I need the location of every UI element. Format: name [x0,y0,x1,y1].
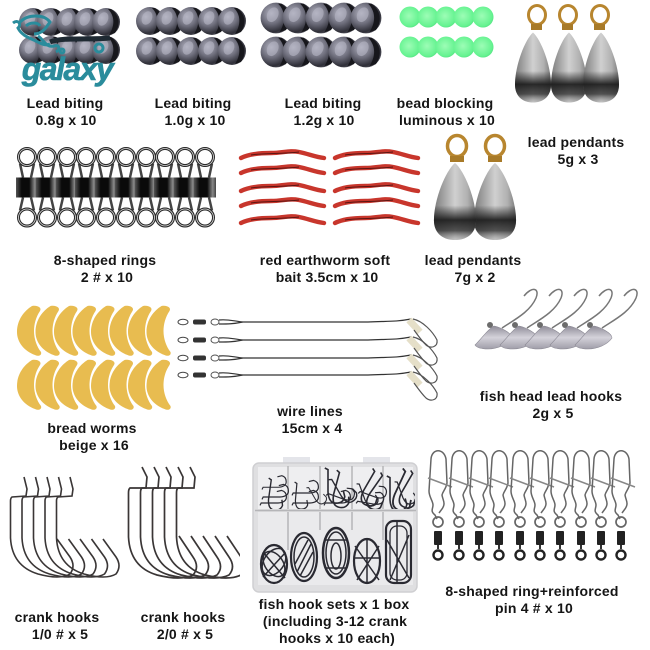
label: lead biting 0.8g: 0.8g x 10 [36,112,96,128]
label: lead biting 1.2g: Lead biting [285,95,361,111]
label: fish head lead hooks: fish head lead hooks [480,388,622,404]
label: lead pendants 7g [425,252,521,285]
label: wire lines: 15cm x 4 [282,420,342,436]
label: red earthworm [260,252,390,285]
label: wire lines: wire lines [276,403,343,419]
bread worms beige [17,306,171,410]
label: crank hooks 1/0: crank hooks [15,609,99,625]
label: 8-shaped rings [54,252,156,285]
lead pendants 7g [434,136,516,240]
label: fish hook sets: (including 3-12 crank [263,613,407,629]
label: lead biting 0.8g: Lead biting [27,95,103,111]
fish hook box [253,457,428,592]
label: wire lines [276,403,343,436]
fish head lead hooks [475,289,637,349]
label: fish head lead hooks: 2g x 5 [533,405,573,421]
crank hooks 2/0 [128,467,244,578]
label: bread worms [47,420,137,453]
label: lead biting 1.0g: Lead biting [155,95,231,111]
label: bead blocking [397,95,495,128]
label: lead biting 1.0g: 1.0g x 10 [165,112,225,128]
label: lead pendants 5g: lead pendants [528,134,624,150]
label: 8-shaped ring + reinforced pin: pin 4 # x 10 [495,600,573,616]
label: lead biting 1.2g: 1.2g x 10 [294,112,354,128]
logo wordmark: galaxy [21,51,116,87]
label: 8-shaped ring + reinforced pin: 8-shaped ring+reinforced [445,583,619,599]
label: fish hook sets: fish hook sets x 1 box [259,596,409,612]
label: crank hooks 2/0 [141,609,225,642]
upper row of hooks [260,467,415,509]
lead pendants 5g [515,6,619,102]
lower row of hooks [257,521,411,583]
label: fish hook sets: hooks x 10 each) [279,630,395,646]
label: lead pendants 5g [528,134,624,167]
lead biting 1.2g beads [261,3,381,67]
luminous blocking beads [400,6,494,58]
red earthworms [241,151,418,223]
label: lead pendants 7g: lead pendants [425,252,521,268]
label: bread worms: bread worms [47,420,137,436]
label: fish head lead hooks [480,388,622,421]
swivel rings 2# [16,148,216,226]
label: bead blocking: luminous x 10 [399,112,495,128]
label: crank hooks 2/0: 2/0 # x 5 [157,626,213,642]
label: 8-shaped rings: 8-shaped rings [54,252,156,268]
logo ornament [13,16,110,53]
crank hooks 1/0 [10,477,119,577]
wire lines [178,319,437,400]
label: bread worms: beige x 16 [59,437,129,453]
label: bead blocking: bead blocking [397,95,493,111]
label: 8-shaped rings: 2 # x 10 [81,269,133,285]
label: lead biting 0.8g [27,95,103,128]
label: red earthworm: bait 3.5cm x 10 [276,269,378,285]
label: crank hooks 2/0: crank hooks [141,609,225,625]
label: red earthworm: red earthworm soft [260,252,390,268]
galaxy logo [13,16,116,87]
label: 8-shaped ring + reinforced pin [445,583,619,616]
label: lead pendants 5g: 5g x 3 [558,151,598,167]
label: crank hooks 1/0: 1/0 # x 5 [32,626,88,642]
label: lead pendants 7g: 7g x 2 [455,269,495,285]
label: fish hook sets [259,596,409,646]
lead biting 1.0g beads [136,7,246,65]
snap swivels 4# [428,451,635,560]
label: lead biting 1.0g [155,95,231,128]
label: lead biting 1.2g [285,95,361,128]
label: crank hooks 1/0 [15,609,99,642]
lead biting 0.8g beads [19,8,120,64]
